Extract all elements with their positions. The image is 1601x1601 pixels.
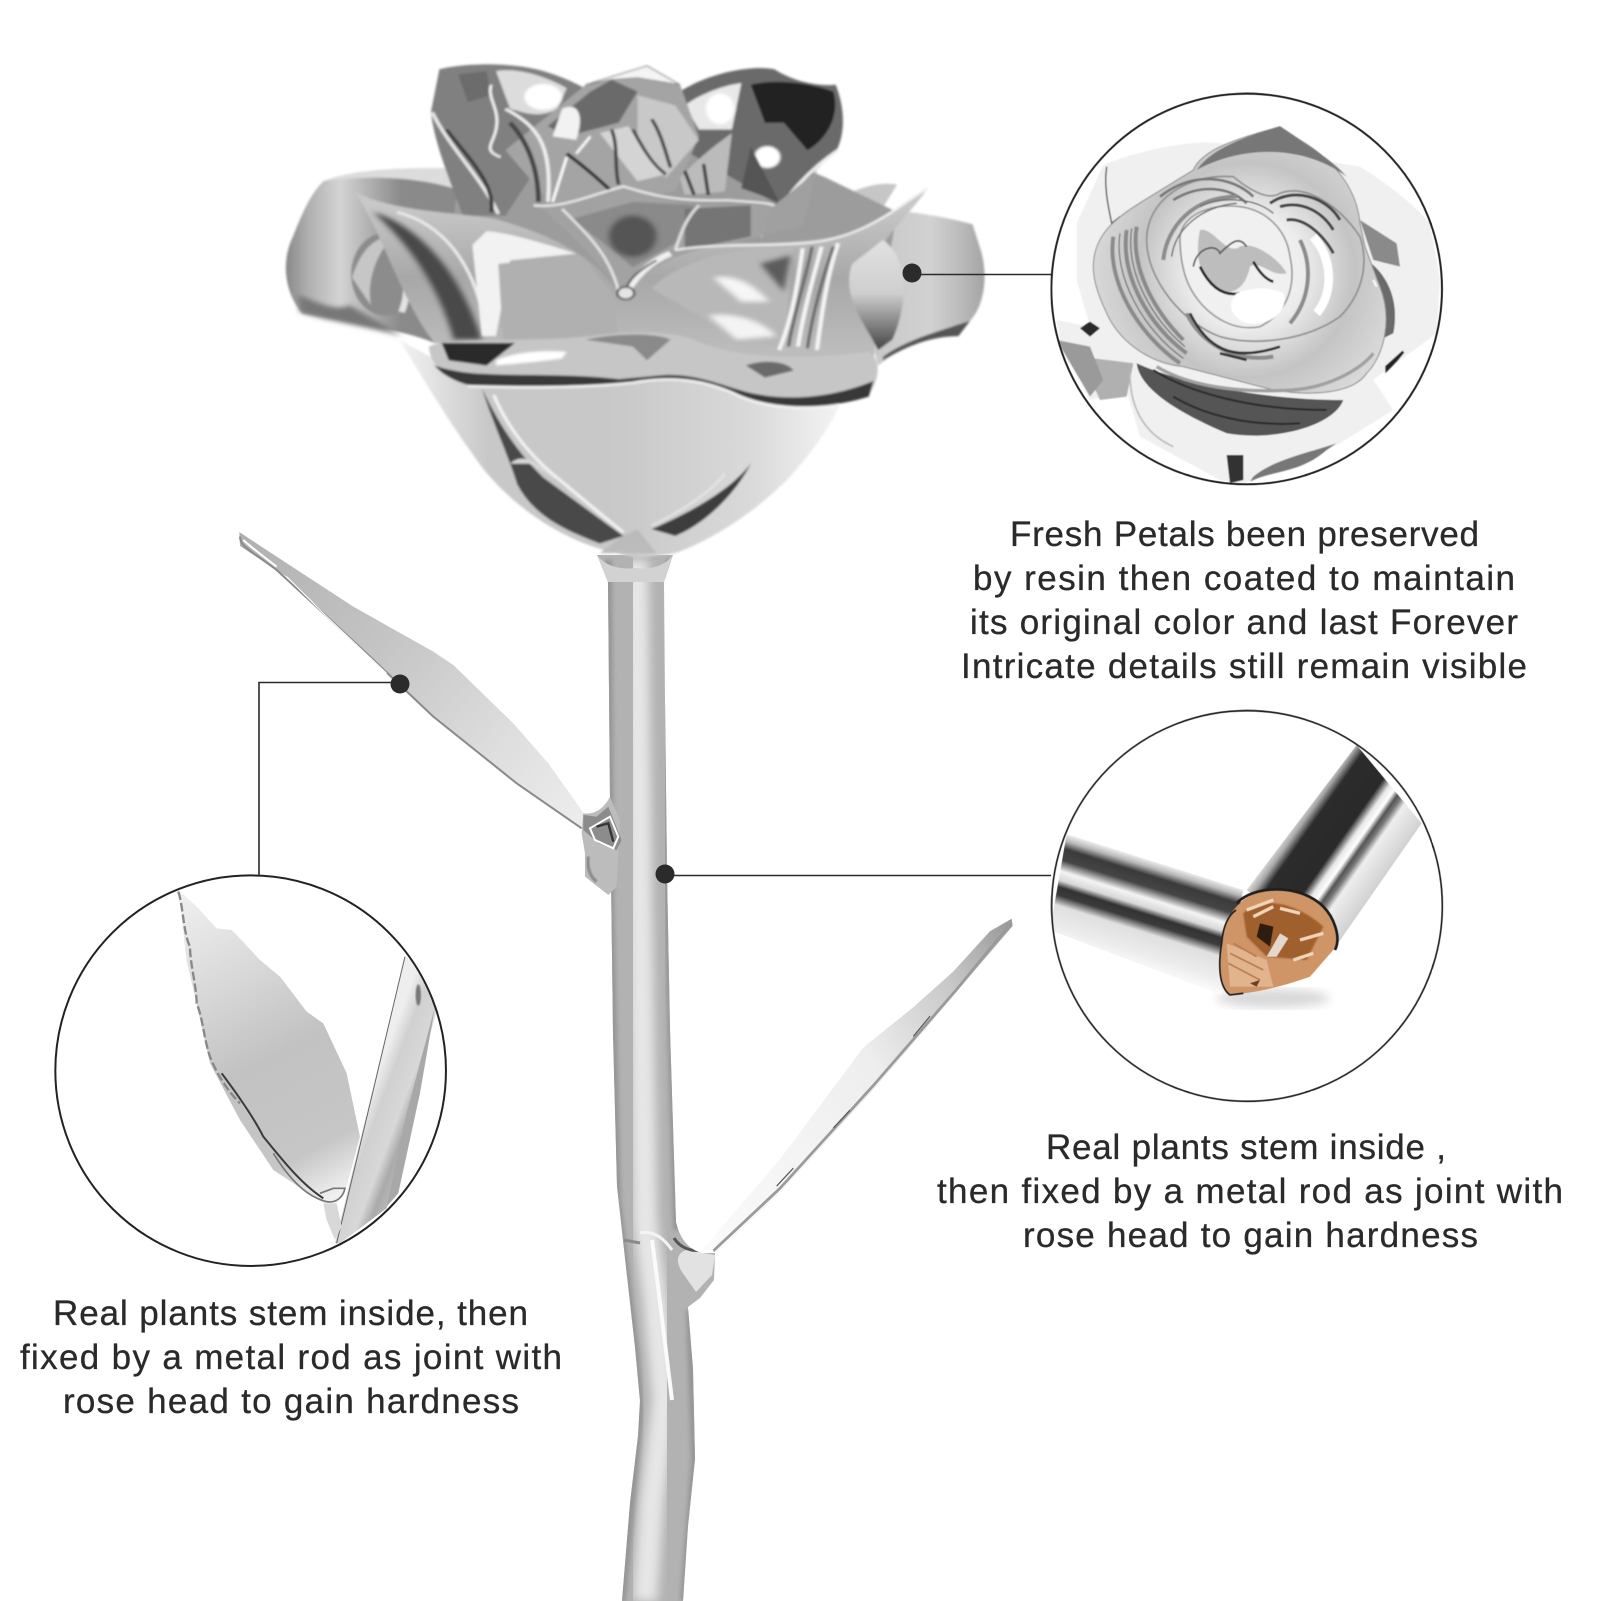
- stem: [597, 555, 715, 1601]
- inner petals: [505, 66, 699, 205]
- callout dot: leaf: [390, 674, 410, 694]
- top right petal: [671, 68, 843, 205]
- middle star petal: [538, 188, 774, 298]
- text: rose head description: by resin then coated to maintain: [973, 559, 1515, 598]
- bowl: [399, 340, 839, 558]
- back left petal: [286, 168, 496, 343]
- lip of front petal: [429, 332, 878, 406]
- rose head: [286, 64, 985, 558]
- rose illustration: [239, 64, 1013, 1601]
- text: leaf description: rose head to gain hardness: [63, 1382, 519, 1421]
- text: leaf description: [20, 1294, 562, 1421]
- detail circle: serrated leaf: [55, 875, 446, 1266]
- callout line: rose head to top detail: [912, 274, 1051, 276]
- text: stem description: rose head to gain hardness: [1023, 1216, 1478, 1255]
- detail circle: cut stem with wooden core: [1050, 711, 1442, 1101]
- callout dot: stem: [656, 864, 674, 884]
- circle outline: [55, 875, 446, 1266]
- text: rose head description: its original color and last Forever: [970, 603, 1518, 642]
- text: stem description: then fixed by a metal rod as joint with: [937, 1172, 1563, 1211]
- right leaf: [703, 919, 1013, 1253]
- text: rose head description: Fresh Petals been preserved: [1010, 515, 1479, 554]
- text: stem description: Real plants stem inside ,: [1046, 1128, 1446, 1167]
- text: leaf description: fixed by a metal rod as joint with: [20, 1338, 562, 1377]
- callout dot: rose head: [902, 264, 922, 282]
- front cup petal: [354, 188, 928, 360]
- stem node: [582, 797, 622, 895]
- circle outline: [1051, 94, 1442, 484]
- text: rose head description: [961, 515, 1527, 686]
- backing of flower centre: [435, 119, 897, 350]
- callout line: leaf to leaf detail: [259, 682, 400, 875]
- right sepal dark: [652, 464, 751, 536]
- back right petal: [855, 210, 985, 365]
- circle outline: [1052, 711, 1442, 1101]
- text: stem description: [937, 1128, 1563, 1255]
- top left petal: [431, 64, 590, 216]
- callout line: stem to rod detail: [665, 874, 1051, 876]
- text: leaf description: Real plants stem inside, then: [53, 1294, 528, 1333]
- detail circle: rose from above: [1051, 94, 1442, 485]
- left sepal dark: [482, 388, 623, 544]
- text: rose head description: Intricate details still remain visible: [961, 647, 1527, 686]
- left leaf: [239, 532, 585, 830]
